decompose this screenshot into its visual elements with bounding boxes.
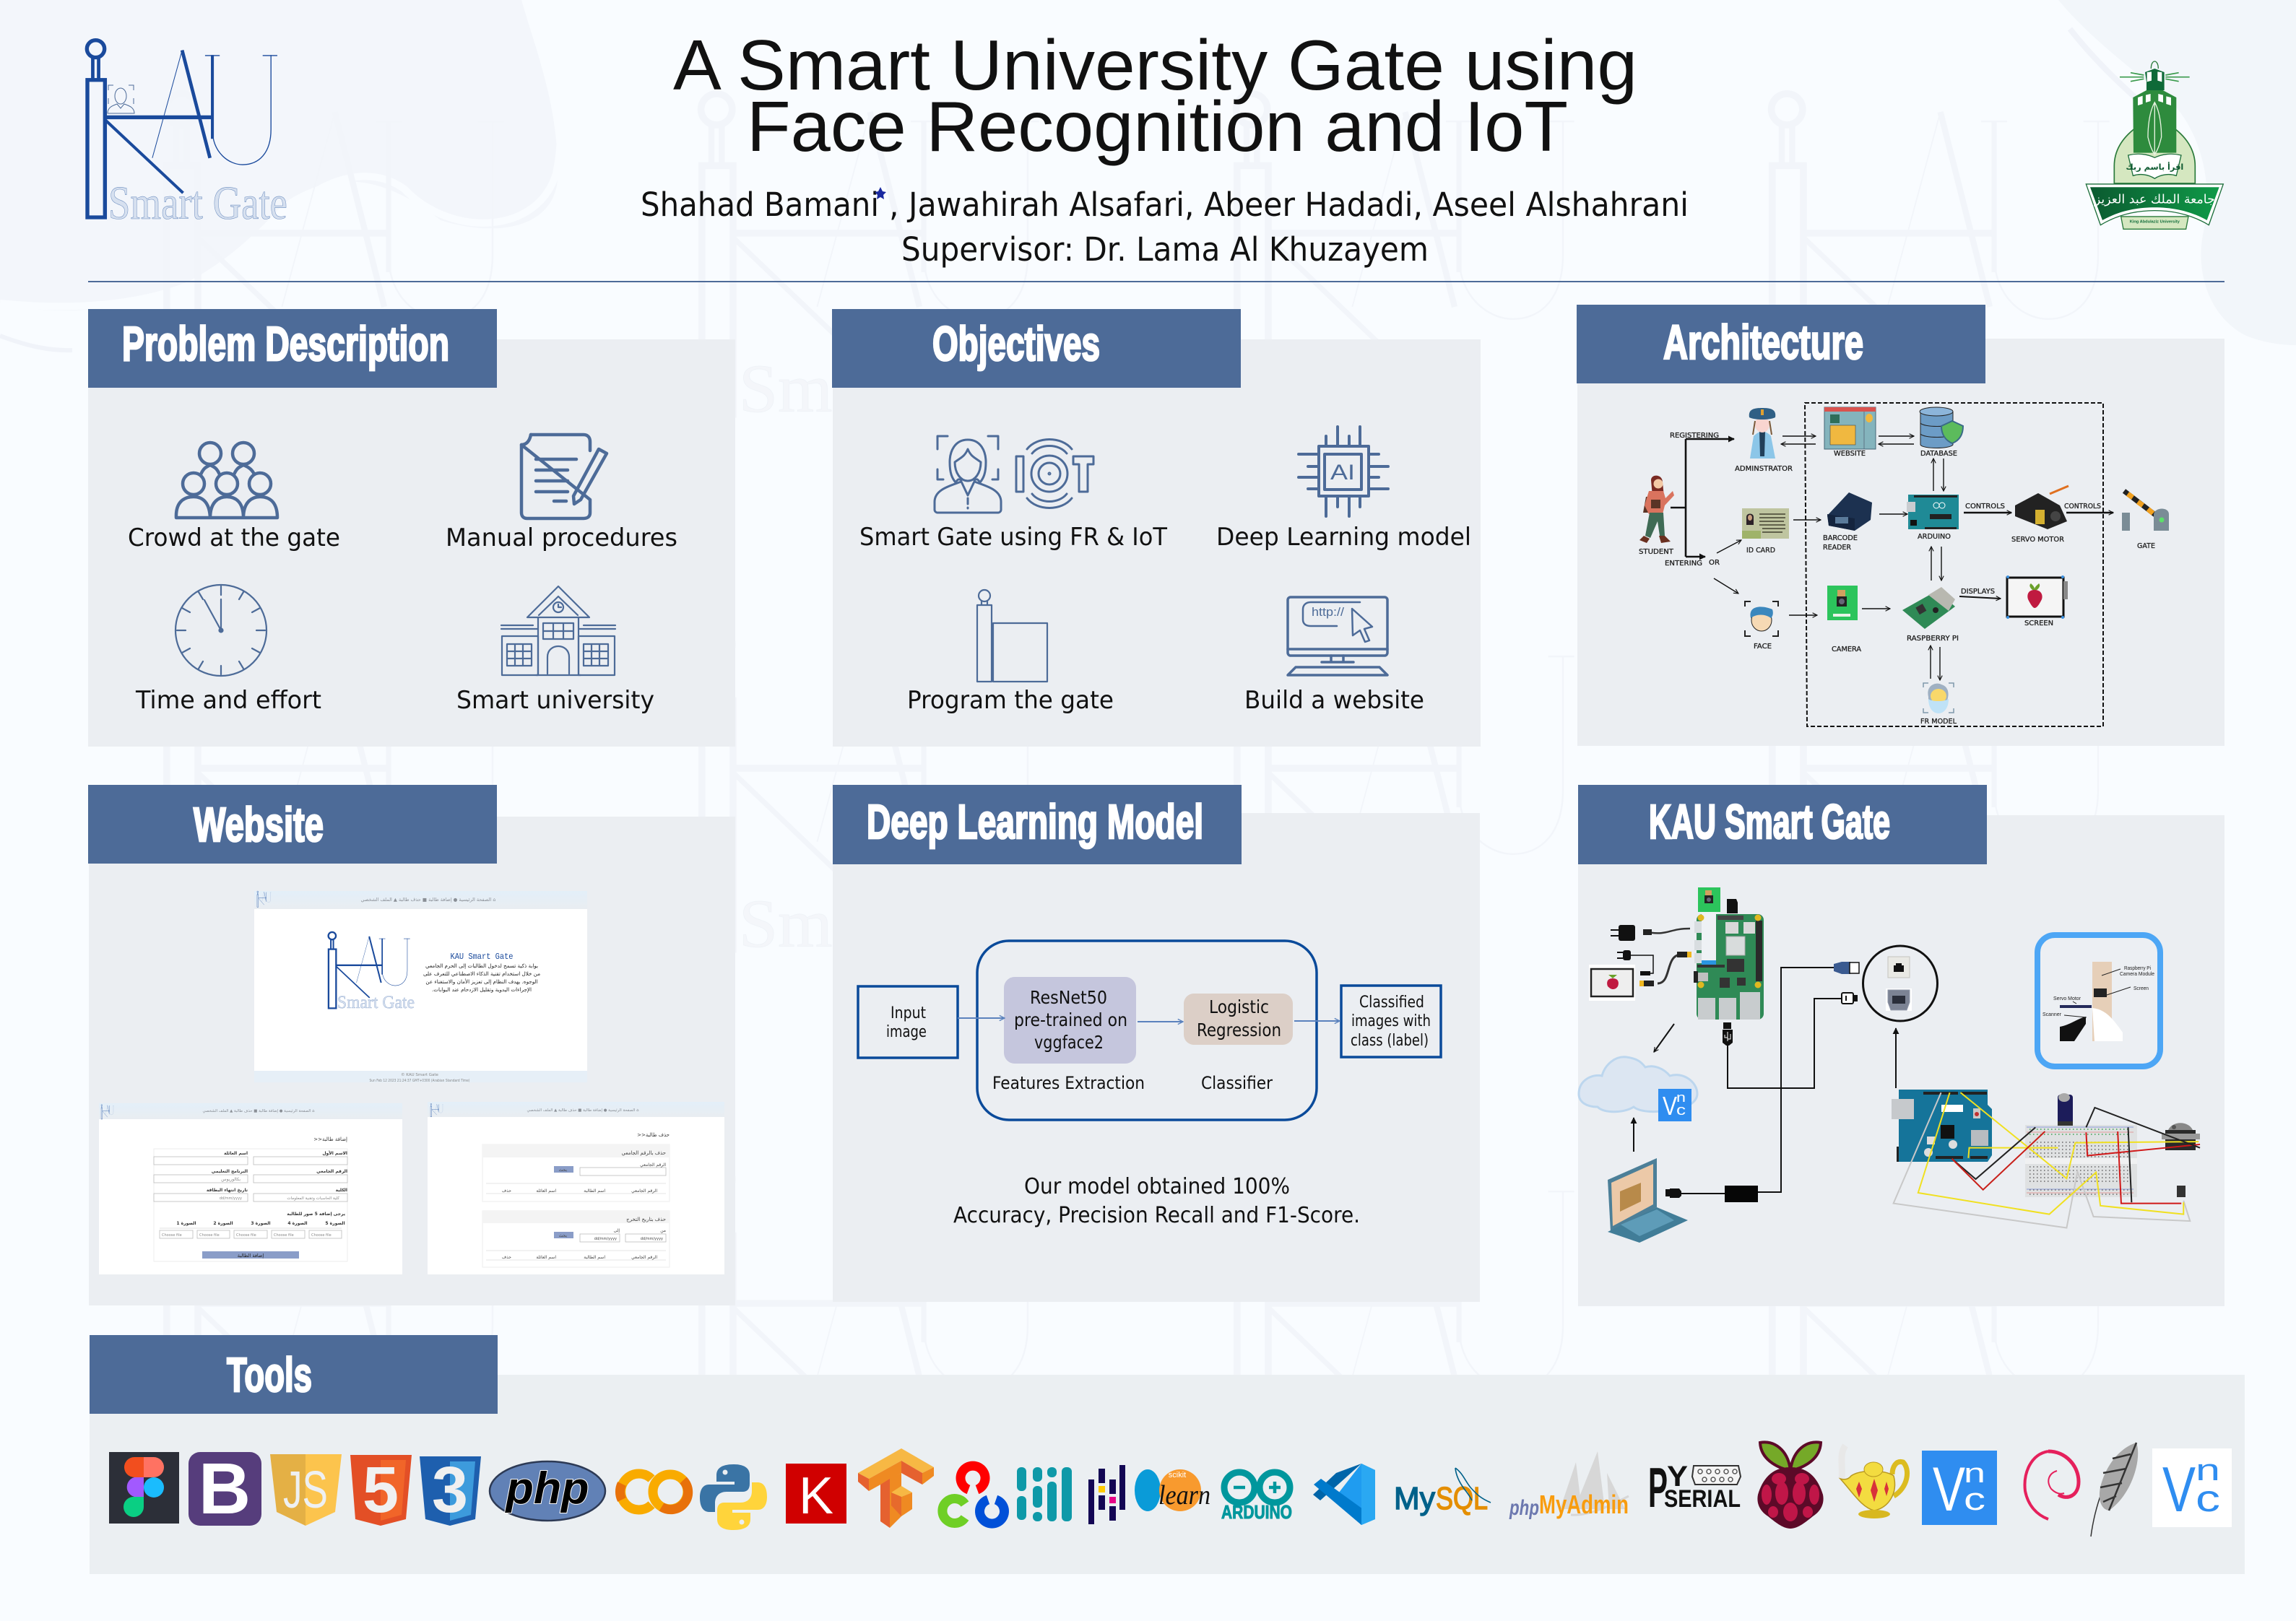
icon: document with pen (521, 435, 607, 518)
screenshot: add student form: ⌂ الصفحة الرئيسية ● إضافة طالبة ■ حذف طالبة ▲ الملف الشخصي (202, 1109, 315, 1113)
screenshot: add student form: الصورة 4 (287, 1221, 308, 1226)
screenshot: home page: الوجوه. يهدف النظام إلى تعزيز الأمان والاستغناء عن (425, 978, 538, 985)
icon: MySQL (1394, 1468, 1491, 1516)
panel: KAU smart gate (1578, 785, 2224, 1306)
panel: deep learning model (833, 785, 1480, 1302)
icon: FR model (1923, 683, 1954, 713)
screenshot: delete student page: اسم الطالبة (584, 1255, 605, 1260)
box: ResNet50 (1004, 977, 1136, 1064)
text: model results: Accuracy, Precision Recall and F1-Score. (953, 1203, 1360, 1228)
screenshot: add student form: كلية الحاسبات وتقنية المعلومات (287, 1196, 339, 1201)
icon: screen (2006, 575, 2068, 619)
screenshot: add student form: Choose file (311, 1233, 332, 1238)
screenshot: add student form: Choose file (236, 1233, 256, 1238)
screenshot: delete student page: إلى (614, 1228, 620, 1233)
icon: VNC: c (1676, 1103, 1686, 1118)
screenshot: add student form: تاريخ انتهاء البطاقة (207, 1188, 248, 1193)
label: deep learning model: Deep Learning model (1216, 523, 1471, 552)
screenshot: home page: Sun Feb 12 2023 21:24:37 GMT+0300 (Arabian Standard Time) (370, 1079, 470, 1083)
screenshot: delete student page: حذف (502, 1255, 511, 1260)
box: logistic regression: Logistic (1209, 996, 1269, 1017)
screenshot: add student form: البرنامج التعليمي (212, 1169, 248, 1174)
icon: chargers and cables (1611, 925, 1691, 986)
screenshot: add student form: Choose file (162, 1233, 182, 1238)
screenshot: add student form: الكلية (336, 1188, 347, 1193)
icon: VNC: V (1663, 1091, 1677, 1121)
text: model results: Our model obtained 100% (1024, 1174, 1290, 1199)
icon: face recognition (935, 436, 1001, 513)
model frame (977, 941, 1317, 1120)
label: id card: ID CARD (1746, 547, 1775, 555)
screenshot: add student form: بكالوريوس (221, 1177, 241, 1182)
heading: problem description (88, 309, 497, 388)
icon: monitor with browser: http:// (1312, 605, 1344, 619)
screenshot: home page: Smart Gate (337, 993, 415, 1012)
screenshot: add student form: Choose file (199, 1233, 220, 1238)
text: Smart Gate (739, 350, 1057, 427)
icon: PySerial: P (1648, 1456, 1668, 1519)
label: database: DATABASE (1920, 450, 1957, 458)
icon: scikit-learn: scikit (1169, 1471, 1186, 1479)
label: crowd at the gate: Crowd at the gate (128, 523, 340, 552)
icon: USB plug at laptop (1665, 1188, 1681, 1198)
icon: MySQL: My (1394, 1481, 1435, 1516)
icon: servo motor (2015, 486, 2068, 529)
screenshot: delete student page: ⌂ الصفحة الرئيسية ● إضافة طالبة ■ حذف طالبة ▲ الملف الشخصي (527, 1108, 639, 1113)
icon: scikit-learn: learn (1158, 1480, 1210, 1511)
icon: VNC Viewer: c (1964, 1482, 1985, 1517)
icon: HTML5: 5 (363, 1454, 399, 1526)
logo: King Abdulaziz University: King Abdulaziz University (2130, 220, 2180, 225)
screenshot: delete student page: اسم العائلة (536, 1188, 556, 1194)
diagram boundary (1805, 403, 2103, 726)
icon: CSS3: 3 (432, 1454, 468, 1526)
panel: tools (90, 1335, 2245, 1574)
callout: ports on gate (1863, 946, 1937, 1021)
icon: USB plug (1723, 1022, 1733, 1046)
icon: PySerial: Y (1667, 1461, 1688, 1492)
label: smart university: Smart university (456, 686, 654, 715)
heading: architecture (1577, 305, 1985, 383)
icon: raspberry pi board (1694, 912, 1764, 1020)
screenshot: home page: الإجراءات اليدوية وتقليل الازدحام عند البوابات. (432, 986, 532, 993)
icon: AI chip (1299, 427, 1388, 516)
icon: VNC Viewer: V (1933, 1455, 1965, 1524)
screenshot: delete student page: بحث (559, 1233, 567, 1238)
label: barcode reader: READER (1823, 544, 1851, 552)
screenshot: add student form (99, 1103, 402, 1274)
label: barcode reader: BARCODE (1823, 534, 1858, 542)
box: input image: Input (891, 1004, 926, 1022)
icon: black adapter box (1725, 1186, 1758, 1202)
screenshot: delete student page: حذف (502, 1188, 511, 1194)
arrow: entering to face (1714, 578, 1738, 594)
logo: King Abdulaziz University: اقرأ باسم ربك (2126, 162, 2183, 172)
icon: phpMyAdmin: php (1509, 1496, 1539, 1520)
heading: tools (90, 1335, 498, 1414)
icon: Keras (786, 1464, 846, 1525)
logo: King Abdulaziz University (2086, 61, 2223, 229)
box: logistic regression (1184, 994, 1293, 1045)
label: entering or: ENTERING (1665, 560, 1702, 568)
icon: barcode reader (1827, 492, 1872, 531)
icon: USB B connector (1842, 993, 1858, 1004)
icon: database (1920, 407, 1963, 448)
screenshot: home page: KAU Smart Gate (451, 952, 513, 962)
screenshot: add student form: الصورة 1 (176, 1221, 196, 1226)
icon: PHP (490, 1461, 605, 1521)
arrows: raspberry pi and FR model (1931, 646, 1940, 680)
screenshot: add student form: dd/mm/yyyy (220, 1196, 242, 1201)
arrow: pi to cloud (1654, 1024, 1674, 1052)
label: website: WEBSITE (1834, 450, 1866, 458)
screenshot: delete student page: dd/mm/yyyy (594, 1237, 617, 1241)
screenshot: add student form: اسم العائلة (224, 1151, 248, 1156)
icon: VNC Server (2152, 1448, 2232, 1527)
icon: Arduino (1221, 1472, 1292, 1523)
arrow and label: arduino controls servo (1964, 503, 2011, 513)
screenshot: delete student page: من (660, 1228, 666, 1233)
label: screen: SCREEN (2024, 620, 2053, 627)
panel: objectives (832, 309, 1481, 747)
icon: cloud (1579, 1057, 1697, 1112)
icon: arduino (1907, 495, 1959, 529)
box: classified images: class (label) (1351, 1032, 1429, 1050)
icon: VNC Server: V (2162, 1453, 2196, 1525)
label: barcode reader (1823, 534, 1858, 552)
screenshot: home page: ⌂ الصفحة الرئيسية ● إضافة طالبة ■ حذف طالبة ▲ الملف الشخصي (361, 897, 495, 903)
label: face: FACE (1754, 643, 1772, 651)
icon: administrator (1749, 408, 1775, 459)
arrow: reader to arduino (1879, 513, 1907, 515)
icon: VNC Viewer (1922, 1451, 1997, 1525)
icon: VNC: n (1676, 1090, 1686, 1105)
icon: JavaScript (270, 1454, 342, 1526)
box: input image (858, 986, 958, 1058)
icon: VNC Server: c (2196, 1478, 2220, 1520)
screenshot: add student form: الصورة 5 (325, 1221, 345, 1226)
title: A Smart University Gate using (673, 25, 1637, 105)
arrows: administrator to website (1781, 436, 1816, 444)
icon: feather (2091, 1443, 2138, 1537)
icon: face in logo (108, 85, 134, 113)
label: features extraction: Features Extraction (992, 1073, 1145, 1093)
arrow: camera to raspberry pi (1862, 608, 1890, 609)
heading: website (88, 785, 497, 864)
arrows: database and arduino (1933, 459, 1944, 491)
callout: built gate photo: Camera Module (2120, 972, 2154, 977)
screenshot: add student form: الرقم الجامعي (316, 1169, 347, 1174)
icon: Debian (2025, 1451, 2079, 1519)
heading: architecture: Architecture (1663, 316, 1863, 370)
logo: KAU Smart Gate: Smart Gate (108, 177, 287, 230)
arrows: registering and entering split (1671, 439, 1734, 557)
panel: website (88, 785, 735, 1305)
label: gate: GATE (2137, 542, 2155, 550)
authors: , Jawahirah Alsafari, Abeer Hadadi, Aseel Alshahrani (889, 186, 1689, 224)
icon: VNC Viewer: n (1964, 1459, 1985, 1489)
icon: IR sensor (2177, 1186, 2185, 1197)
icon: breadboard (2025, 1125, 2137, 1197)
icon: camera module (1698, 887, 1720, 912)
icon: raspberry pi board (1902, 587, 1955, 629)
arrow and label: servo controls gate: CONTROLS (2064, 503, 2101, 510)
screenshot: delete student page: حذف بتاريخ التخرج (626, 1217, 666, 1222)
icon: website (1824, 407, 1876, 449)
screenshot: delete student page (428, 1102, 724, 1274)
icon: Seaborn bars (1017, 1467, 1072, 1521)
box: classified images (1341, 986, 1441, 1057)
icon: face (1745, 601, 1778, 636)
icon: screen (1589, 965, 1635, 1001)
callout: built gate photo: Raspberry Pi (2124, 966, 2151, 971)
arrows: website to database (1879, 436, 1914, 444)
icon: laptop (1608, 1158, 1688, 1243)
icon: HTML5 (350, 1454, 412, 1526)
arrows: model flow (958, 1018, 1340, 1022)
icon: Google Colab (620, 1474, 688, 1510)
label: time and effort: Time and effort (135, 686, 321, 715)
wires: circuit (1894, 1092, 2200, 1228)
heading: objectives: Objectives (932, 317, 1100, 371)
label: servo motor: SERVO MOTOR (2011, 536, 2064, 544)
icon: arduino ethernet shield (1892, 1090, 1992, 1162)
box: input image: image (886, 1023, 927, 1041)
screenshot: add student form: إضافة الطالبة (238, 1253, 264, 1259)
authors: Shahad Bamani (641, 186, 879, 224)
arrows: arduino and raspberry pi (1931, 547, 1941, 581)
icon: phpMyAdmin: MyAdmin (1539, 1490, 1629, 1519)
screenshot: delete student page: بحث (559, 1168, 567, 1173)
screenshot: add student form: الاسم الأول (322, 1150, 347, 1156)
label: manual procedures: Manual procedures (446, 523, 677, 552)
screenshot: add student form: الصورة 2 (213, 1221, 233, 1226)
arrow: face to camera (1789, 614, 1817, 616)
icon: student (1639, 476, 1674, 543)
screenshot: delete student page: dd/mm/yyyy (641, 1237, 663, 1241)
label: FR model: FR MODEL (1920, 718, 1957, 726)
callout: built gate photo: Screen (2133, 986, 2149, 991)
screenshot: home page: © KAU Smart Gate (401, 1072, 439, 1077)
icon: PySerial (1648, 1456, 1741, 1519)
icon: id card (1742, 508, 1789, 539)
icon: Arduino: ARDUINO (1221, 1501, 1292, 1523)
label: program the gate: Program the gate (907, 686, 1114, 715)
icon: VS Code (1313, 1464, 1375, 1525)
icon: Raspberry Pi (1757, 1442, 1824, 1529)
arrow and label: displays: DISPLAYS (1961, 588, 1995, 596)
label: classifier: Classifier (1201, 1073, 1273, 1093)
text: model results (953, 1174, 1360, 1228)
icon: Figma (109, 1452, 179, 1524)
wires: network connections (1681, 968, 1842, 1194)
arrow: laptop to cloud (1633, 1118, 1634, 1152)
screenshot: home page (254, 891, 587, 1083)
icon: pandas (1088, 1465, 1125, 1524)
label: administrator: ADMINSTRATOR (1735, 465, 1793, 473)
heading: objectives (832, 309, 1241, 388)
label: raspberry pi: RASPBERRY PI (1907, 635, 1959, 643)
icon: CSS3 (420, 1454, 481, 1526)
icon: servo (2162, 1123, 2200, 1150)
panel: architecture (1577, 305, 2224, 746)
screenshot: delete student page: اسم العائلة (536, 1255, 556, 1260)
icon: MySQL: SQL (1436, 1481, 1488, 1516)
screenshot: delete student page: الرقم الجامعي (631, 1188, 657, 1194)
icon: VNC Server: n (2196, 1453, 2220, 1487)
arrow and label: servo controls gate (2064, 503, 2113, 513)
heading: problem description: Problem Description (122, 317, 449, 371)
label: smart gate using FR and IoT: Smart Gate using FR & IoT (859, 523, 1167, 552)
heading: KAU smart gate: KAU Smart Gate (1649, 795, 1890, 849)
arrows: entering to id card and reader (1717, 520, 1821, 553)
screenshot: delete student page: حذف بالرقم الجامعي (622, 1150, 666, 1156)
label: camera: CAMERA (1832, 646, 1862, 653)
callout: built gate photo: Scanner (2042, 1012, 2062, 1017)
box: ResNet50: pre-trained on (1014, 1009, 1127, 1030)
icon: camera module (1827, 586, 1858, 620)
screenshot: add student form: >>إضافة طالبة (313, 1137, 347, 1142)
icon: SD card (1727, 899, 1738, 913)
logo: KAU Smart Gate (87, 40, 287, 230)
label: registering: REGISTERING (1670, 432, 1719, 440)
heading: KAU smart gate (1578, 785, 1987, 864)
supervisor: Supervisor: Dr. Lama Al Khuzayem (901, 230, 1429, 269)
icon: IoT (1016, 439, 1093, 508)
logo: King Abdulaziz University: جامعة الملك عبد العزيز (2094, 193, 2215, 207)
label: student: STUDENT (1639, 548, 1673, 556)
arrow and label: arduino controls servo: CONTROLS (1965, 503, 2005, 510)
screenshot: home page: من خلال استخدام تقنية الذكاء الاصطناعي للتعرف على (423, 970, 540, 977)
heading: website: Website (194, 798, 324, 852)
box: logistic regression: Regression (1197, 1020, 1281, 1040)
box: classified images: Classified (1359, 994, 1424, 1012)
icon: phpMyAdmin (1509, 1451, 1629, 1520)
icon: OpenCV (943, 1466, 1004, 1524)
icon: ethernet connector (1834, 962, 1859, 974)
box: classified images: images with (1351, 1012, 1431, 1030)
icon: JavaScript: JS (283, 1461, 328, 1519)
icon: TensorFlow (858, 1448, 934, 1528)
icon: VNC (1658, 1089, 1691, 1121)
screenshot: delete student page: اسم الطالبة (584, 1188, 605, 1194)
icon: university building (501, 586, 615, 675)
text: Smart Gate (739, 885, 1057, 962)
icon: AI chip: AI (1330, 461, 1355, 484)
heading: deep learning model: Deep Learning Model (867, 795, 1203, 849)
icon: Bootstrap: B (199, 1448, 251, 1529)
arrow and label: displays (1959, 588, 2001, 599)
icon: monitor with browser (1288, 597, 1387, 675)
icon: crowd (176, 443, 277, 518)
panel: problem description (88, 309, 735, 747)
icon: Python (700, 1464, 767, 1530)
title: Face Recognition and IoT (747, 87, 1568, 166)
icon: clock (176, 585, 267, 676)
callout: built gate photo: Servo Motor (2053, 996, 2081, 1001)
callout: built gate photo (2037, 935, 2160, 1066)
icon: gate (2122, 491, 2169, 531)
box: ResNet50: vggface2 (1034, 1032, 1104, 1053)
icon: corresponding author star (875, 187, 886, 199)
screenshot: delete student page: الرقم الجامعي (631, 1255, 657, 1260)
screenshot: add student form: الصورة 3 (251, 1221, 271, 1226)
icon: capacitor (2058, 1093, 2073, 1126)
icon: Thonny lamp (1840, 1446, 1907, 1518)
label: build a website: Build a website (1244, 686, 1424, 715)
screenshot: delete student page: >>حذف طالبة (637, 1132, 670, 1138)
screenshot: home page: بوابة ذكية تسمح لدخول الطالبات إلى الحرم الجامعي (425, 962, 538, 969)
label: entering or (1665, 559, 1720, 568)
screenshot: add student form: Choose file (274, 1233, 294, 1238)
heading: deep learning model (833, 785, 1242, 864)
icon: PHP: php (504, 1464, 589, 1513)
icon: scikit-learn (1135, 1469, 1210, 1511)
label: arduino: ARDUINO (1918, 533, 1951, 541)
screenshot: add student form: يرجى إضافة 5 صور للطالبة (287, 1212, 345, 1217)
title (673, 25, 1637, 166)
icon: Keras: K (799, 1467, 833, 1525)
screenshot: delete student page: الرقم الجامعي (640, 1162, 666, 1168)
icon: gate (977, 590, 1047, 682)
label: entering or: OR (1709, 559, 1720, 567)
heading: tools: Tools (227, 1348, 312, 1402)
arrow: gate controller to ports (1895, 1028, 1897, 1088)
icon: PySerial: SERIAL (1664, 1485, 1741, 1513)
box: ResNet50: ResNet50 (1030, 987, 1107, 1008)
